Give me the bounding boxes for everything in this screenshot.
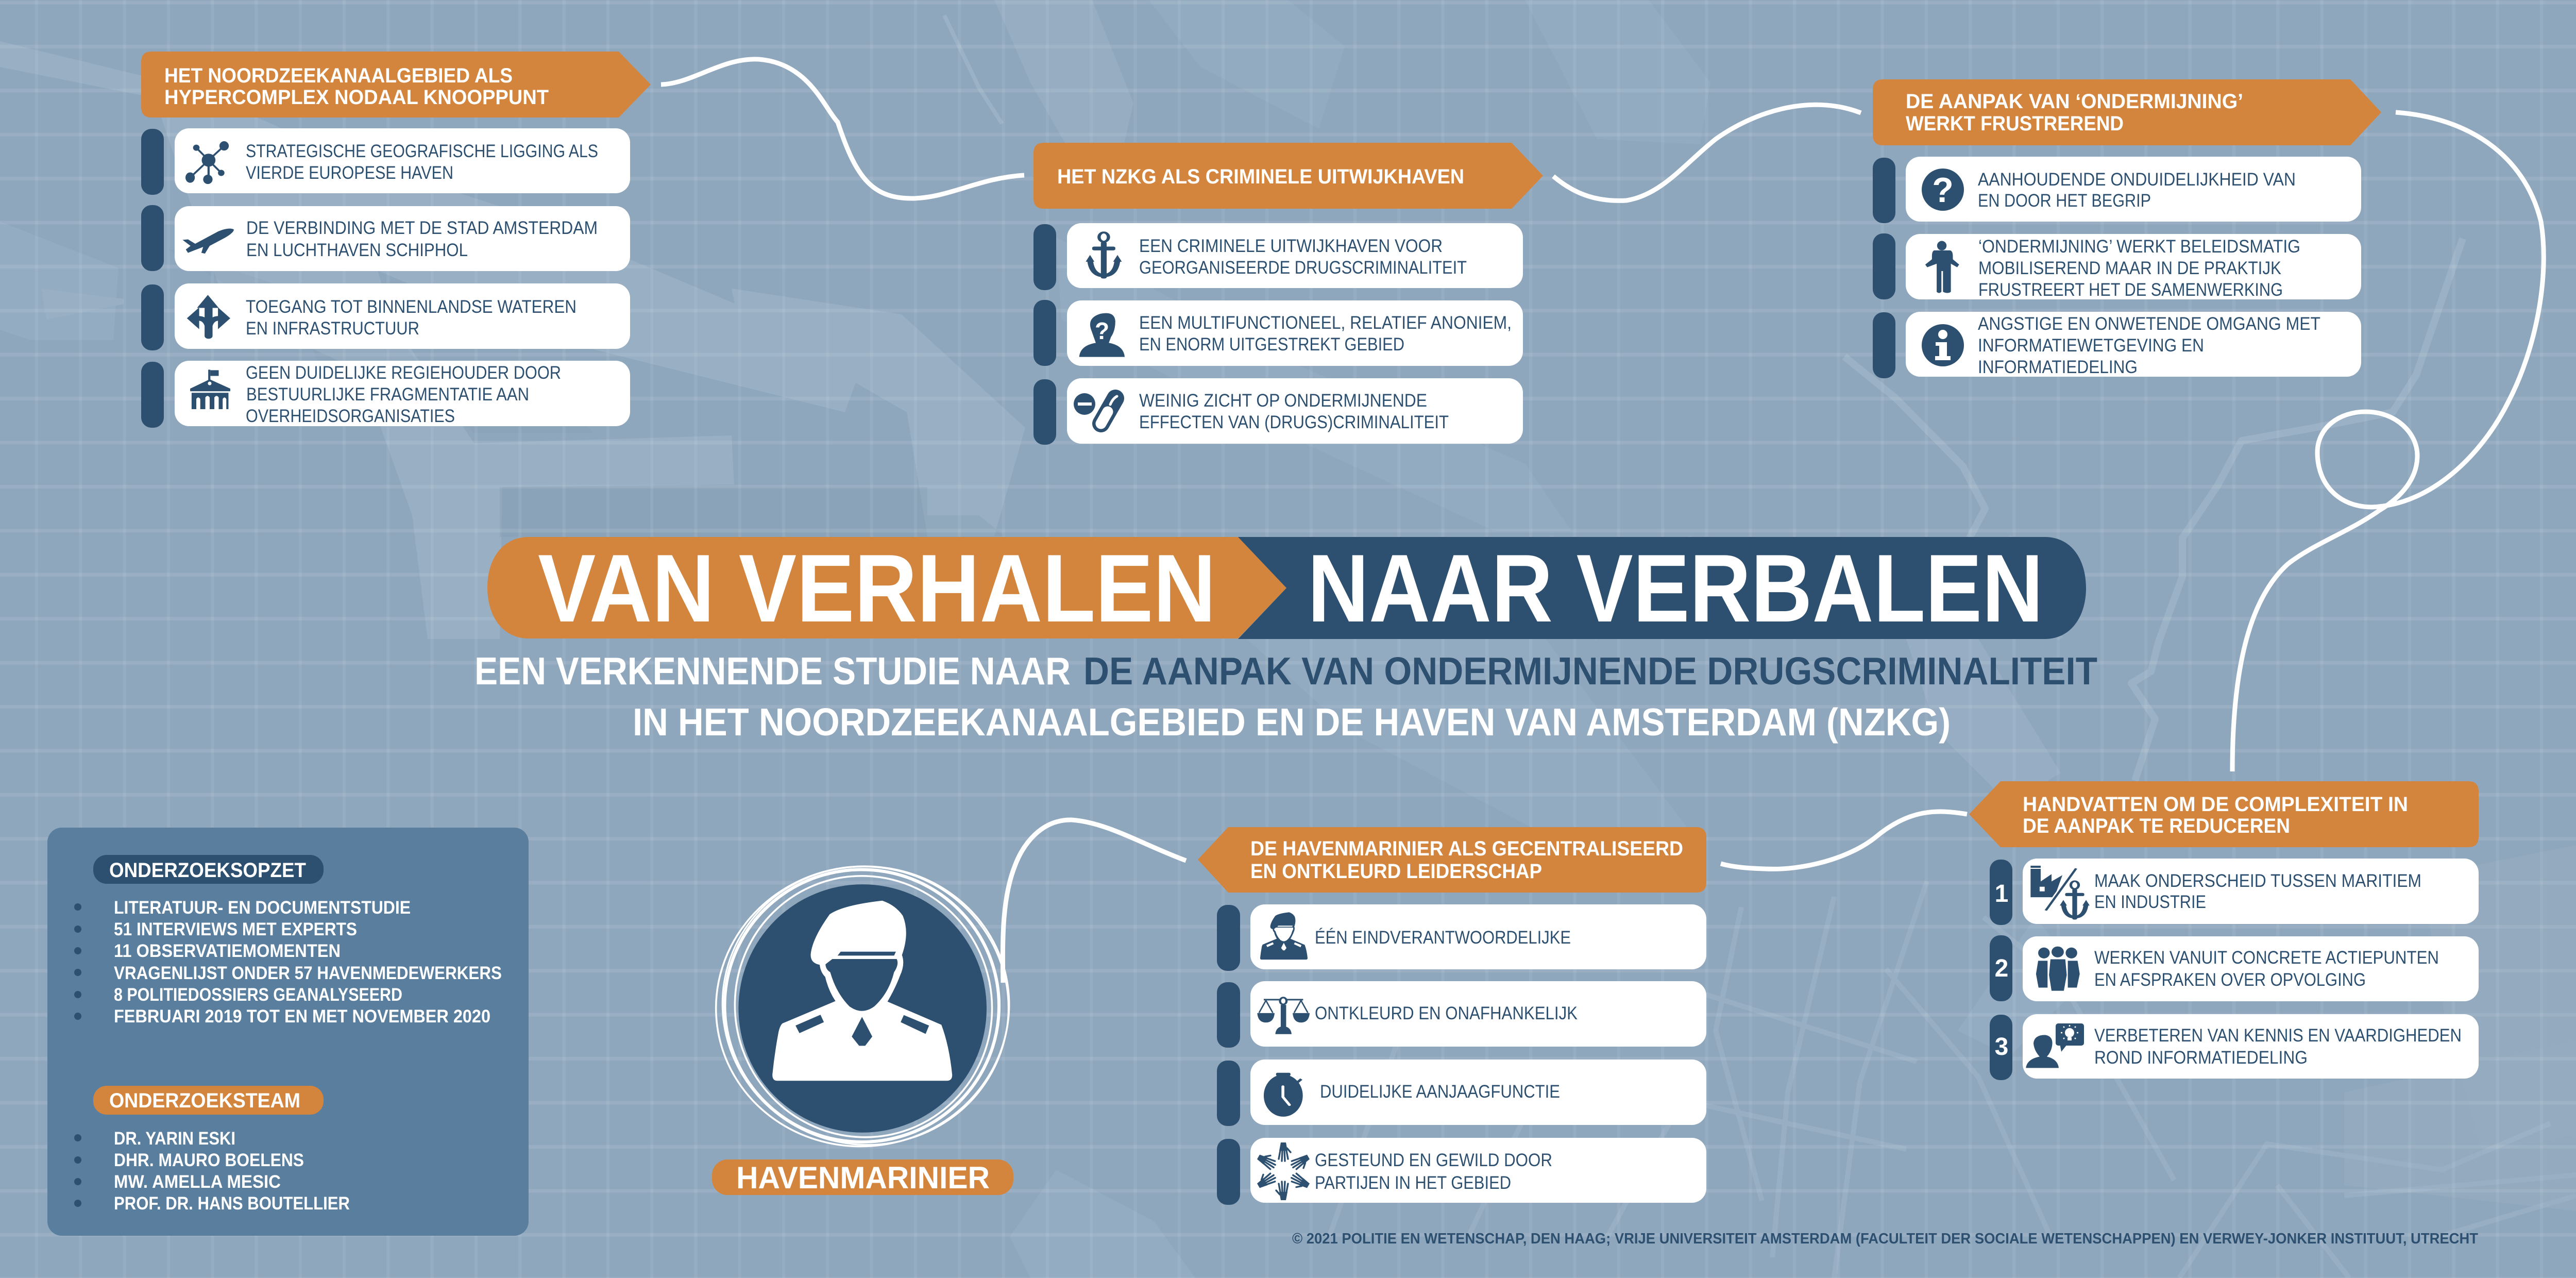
icon: plane xyxy=(182,228,234,254)
uniform xyxy=(772,1001,952,1081)
icon: information xyxy=(1922,324,1964,366)
icon: anonymous person xyxy=(1079,313,1125,357)
item: eindverantwoordelijke: ÉÉN EINDVERANTWOORDELIJKE xyxy=(1315,928,1571,948)
copyright footer: © 2021 POLITIE EN WETENSCHAP, DEN HAAG; VRIJE UNIVERSITEIT AMSTERDAM (FACULTEIT DER SOCIALE WETENSCHAPPEN) EN VERWEY-JONKER INSTITUUT, UTRECHT xyxy=(1292,1231,2478,1247)
item: binnenlandse wateren xyxy=(141,283,630,350)
heading panel 4: EN ONTKLEURD LEIDERSCHAP xyxy=(1250,860,1542,883)
item 1: maritiem en industrie: EN INDUSTRIE xyxy=(2094,892,2206,912)
onderzoeksopzet list: 8 POLITIEDOSSIERS GEANALYSEERD xyxy=(114,985,402,1005)
heading panel 4 xyxy=(1198,827,1706,893)
onderzoeksteam list xyxy=(74,1129,350,1214)
heading panel 1: HYPERCOMPLEX NODAAL KNOOPPUNT xyxy=(164,86,549,109)
onderzoeksteam list: DHR. MAURO BOELENS xyxy=(114,1150,304,1170)
item: verbinding: EN LUCHTHAVEN SCHIPHOL xyxy=(246,240,468,260)
item 2: actiepunten: 2 xyxy=(1995,955,2008,982)
panel background xyxy=(47,828,529,1236)
item: eindverantwoordelijke xyxy=(1217,904,1706,971)
item: weinig zicht: EFFECTEN VAN (DRUGS)CRIMINALITEIT xyxy=(1139,412,1449,432)
title banner xyxy=(487,534,2086,642)
heading panel 1: HET NOORDZEEKANAALGEBIED ALS xyxy=(164,64,513,87)
icon: crossroads arrows xyxy=(187,295,230,336)
connector: panel 4 to portrait xyxy=(1003,820,1186,983)
item: regiehouder: BESTUURLIJKE FRAGMENTATIE AAN xyxy=(246,384,529,405)
panel: havenmarinier als leiderschap xyxy=(1198,827,1706,1205)
onderzoeksopzet list xyxy=(74,898,502,1027)
item: uitwijkhaven: EEN CRIMINELE UITWIJKHAVEN VOOR xyxy=(1139,236,1443,256)
item: weinig zicht: WEINIG ZICHT OP ONDERMIJNENDE xyxy=(1139,391,1427,411)
heading panel 3: DE AANPAK VAN ‘ONDERMIJNING’ xyxy=(1906,90,2243,113)
item: beleidsmatig: MOBILISEREND MAAR IN DE PRAKTIJK xyxy=(1978,258,2281,278)
item 2: actiepunten: EN AFSPRAKEN OVER OPVOLGING xyxy=(2094,970,2366,990)
item: onduidelijkheid: EN DOOR HET BEGRIP xyxy=(1978,191,2151,211)
icon: anchor xyxy=(1086,232,1122,278)
item: uitwijkhaven xyxy=(1033,223,1523,290)
icon: scales xyxy=(1257,998,1310,1034)
item: regiehouder xyxy=(141,361,630,428)
item: weinig zicht xyxy=(1033,378,1523,445)
onderzoeksopzet list: FEBRUARI 2019 TOT EN MET NOVEMBER 2020 xyxy=(114,1006,490,1027)
onderzoeksteam list: MW. AMELLA MESIC xyxy=(114,1172,281,1192)
subtitle xyxy=(474,649,2097,744)
icon: stopwatch xyxy=(1264,1073,1303,1117)
item: informatiewetgeving xyxy=(1873,312,2361,378)
onderzoeksopzet list: VRAGENLIJST ONDER 57 HAVENMEDEWERKERS xyxy=(114,963,502,983)
title left: VAN VERHALEN xyxy=(538,534,1216,642)
subtitle: IN HET NOORDZEEKANAALGEBIED EN DE HAVEN VAN AMSTERDAM (NZKG) xyxy=(633,700,1951,744)
portrait: havenmarinier icon xyxy=(693,836,1038,1175)
heading panel 5: DE AANPAK TE REDUCEREN xyxy=(2023,815,2290,837)
icon: town hall xyxy=(190,369,230,409)
connector: panel 3 looping to panel 5 xyxy=(2232,112,2544,771)
icon: shrugging person xyxy=(1925,241,1959,293)
item: verbinding xyxy=(141,205,630,271)
item: multifunctioneel gebied xyxy=(1033,300,1523,366)
item: ontkleurd xyxy=(1217,981,1706,1048)
item: informatiewetgeving: INFORMATIEDELING xyxy=(1978,357,2138,377)
connector: panel 2 to panel 3 xyxy=(1553,105,1861,200)
heading panel 4: DE HAVENMARINIER ALS GECENTRALISEERD xyxy=(1250,837,1683,860)
subtitle: DE AANPAK VAN ONDERMIJNENDE DRUGSCRIMINALITEIT xyxy=(1083,649,2097,693)
sketched white rings xyxy=(693,836,1038,1175)
onderzoeksopzet list: 51 INTERVIEWS MET EXPERTS xyxy=(114,919,357,939)
item: gesteund en gewild: PARTIJEN IN HET GEBIED xyxy=(1315,1173,1511,1193)
onderzoeksteam heading: ONDERZOEKSTEAM xyxy=(109,1089,300,1112)
item 2: actiepunten: WERKEN VANUIT CONCRETE ACTIEPUNTEN xyxy=(2094,948,2439,968)
item 1: maritiem en industrie: MAAK ONDERSCHEID TUSSEN MARITIEM xyxy=(2094,871,2421,891)
onderzoeksopzet list: 11 OBSERVATIEMOMENTEN xyxy=(114,941,341,961)
item: beleidsmatig xyxy=(1873,233,2361,300)
item: beleidsmatig: FRUSTREERT HET DE SAMENWERKING xyxy=(1978,280,2283,300)
item: gesteund en gewild xyxy=(1217,1138,1706,1205)
item 1: maritiem en industrie xyxy=(1990,859,2479,925)
item: multifunctioneel gebied: EN ENORM UITGESTREKT GEBIED xyxy=(1139,334,1404,355)
panel: noordzeekanaalgebied als knooppunt xyxy=(141,52,651,428)
item 3: kennis en vaardigheden: VERBETEREN VAN KENNIS EN VAARDIGHEDEN xyxy=(2094,1025,2462,1046)
item: gesteund en gewild: GESTEUND EN GEWILD DOOR xyxy=(1315,1150,1552,1170)
icon: circle of hands xyxy=(1255,1142,1312,1200)
item: regiehouder: GEEN DUIDELIJKE REGIEHOUDER DOOR xyxy=(246,363,561,383)
dark disc xyxy=(738,884,987,1133)
item: verbinding: DE VERBINDING MET DE STAD AMSTERDAM xyxy=(246,218,598,238)
icon: small marinier xyxy=(1260,912,1308,960)
item 3: kennis en vaardigheden: ROND INFORMATIEDELING xyxy=(2094,1048,2308,1068)
item 3: kennis en vaardigheden: 3 xyxy=(1995,1033,2008,1061)
icon: three people xyxy=(2036,947,2080,992)
panel: nzkg als criminele uitwijkhaven xyxy=(1033,143,1543,445)
panel: handvatten xyxy=(1969,781,2479,1080)
heading panel 2 xyxy=(1033,143,1543,209)
heading panel 1 xyxy=(141,52,651,117)
heading panel 5: HANDVATTEN OM DE COMPLEXITEIT IN xyxy=(2023,793,2408,816)
banner orange half xyxy=(487,537,1286,638)
onderzoeksteam heading xyxy=(93,1086,324,1115)
item: ontkleurd: ONTKLEURD EN ONAFHANKELIJK xyxy=(1315,1003,1578,1023)
onderzoeksopzet list: LITERATUUR- EN DOCUMENTSTUDIE xyxy=(114,898,411,918)
heading panel 5 xyxy=(1969,781,2479,847)
icon: anonymous person: ? xyxy=(1095,317,1109,344)
icon: network xyxy=(185,141,229,184)
subtitle: EEN VERKENNENDE STUDIE NAAR xyxy=(474,649,1071,693)
onderzoeksteam list: PROF. DR. HANS BOUTELLIER xyxy=(114,1193,350,1214)
item: strategische ligging: VIERDE EUROPESE HAVEN xyxy=(246,163,453,183)
icon: question mark: ? xyxy=(1932,171,1954,210)
item: strategische ligging: STRATEGISCHE GEOGRAFISCHE LIGGING ALS xyxy=(246,141,598,161)
item: beleidsmatig: ‘ONDERMIJNING’ WERKT BELEIDSMATIG xyxy=(1978,237,2300,257)
item: binnenlandse wateren: TOEGANG TOT BINNENLANDSE WATEREN xyxy=(246,297,577,317)
heading panel 3 xyxy=(1873,79,2381,145)
head and beret xyxy=(811,901,906,1014)
item: informatiewetgeving: INFORMATIEWETGEVING EN xyxy=(1978,335,2204,356)
item: strategische ligging xyxy=(141,128,630,195)
icon: no entry and capsule xyxy=(1074,393,1117,424)
item: aanjaagfunctie xyxy=(1217,1060,1706,1126)
heading panel 2: HET NZKG ALS CRIMINELE UITWIJKHAVEN xyxy=(1057,165,1464,188)
item 1: maritiem en industrie: 1 xyxy=(1995,880,2008,907)
title right: NAAR VERBALEN xyxy=(1308,534,2043,642)
item: regiehouder: OVERHEIDSORGANISATIES xyxy=(246,406,455,426)
connector: panel 5 to panel 4 xyxy=(1721,812,1967,869)
item: binnenlandse wateren: EN INFRASTRUCTUUR xyxy=(246,318,419,339)
portrait label: HAVENMARINIER xyxy=(736,1161,990,1195)
item: informatiewetgeving: ANGSTIGE EN ONWETENDE OMGANG MET xyxy=(1978,314,2320,334)
icon: factory versus anchor xyxy=(2030,866,2090,919)
panel: aanpak ondermijning xyxy=(1873,79,2381,378)
item 3: kennis en vaardigheden xyxy=(1990,1014,2479,1080)
connector: panel 1 to panel 2 xyxy=(661,59,1024,198)
heading panel 3: WERKT FRUSTREREND xyxy=(1906,112,2124,135)
item 2: actiepunten xyxy=(1990,935,2479,1001)
panel: onderzoeksopzet en onderzoeksteam xyxy=(47,828,529,1236)
item: onduidelijkheid: AANHOUDENDE ONDUIDELIJKHEID VAN xyxy=(1978,170,2296,190)
item: multifunctioneel gebied: EEN MULTIFUNCTIONEEL, RELATIEF ANONIEM, xyxy=(1139,313,1512,333)
banner blue half xyxy=(1238,537,2086,639)
icon: person with idea bubble xyxy=(2026,1023,2084,1068)
item: aanjaagfunctie: DUIDELIJKE AANJAAGFUNCTIE xyxy=(1320,1082,1560,1102)
onderzoeksteam list: DR. YARIN ESKI xyxy=(114,1129,235,1149)
icon: question mark xyxy=(1922,169,1964,211)
item: uitwijkhaven: GEORGANISEERDE DRUGSCRIMINALITEIT xyxy=(1139,258,1467,278)
item: onduidelijkheid xyxy=(1873,157,2361,223)
onderzoeksopzet heading: ONDERZOEKSOPZET xyxy=(109,859,306,882)
